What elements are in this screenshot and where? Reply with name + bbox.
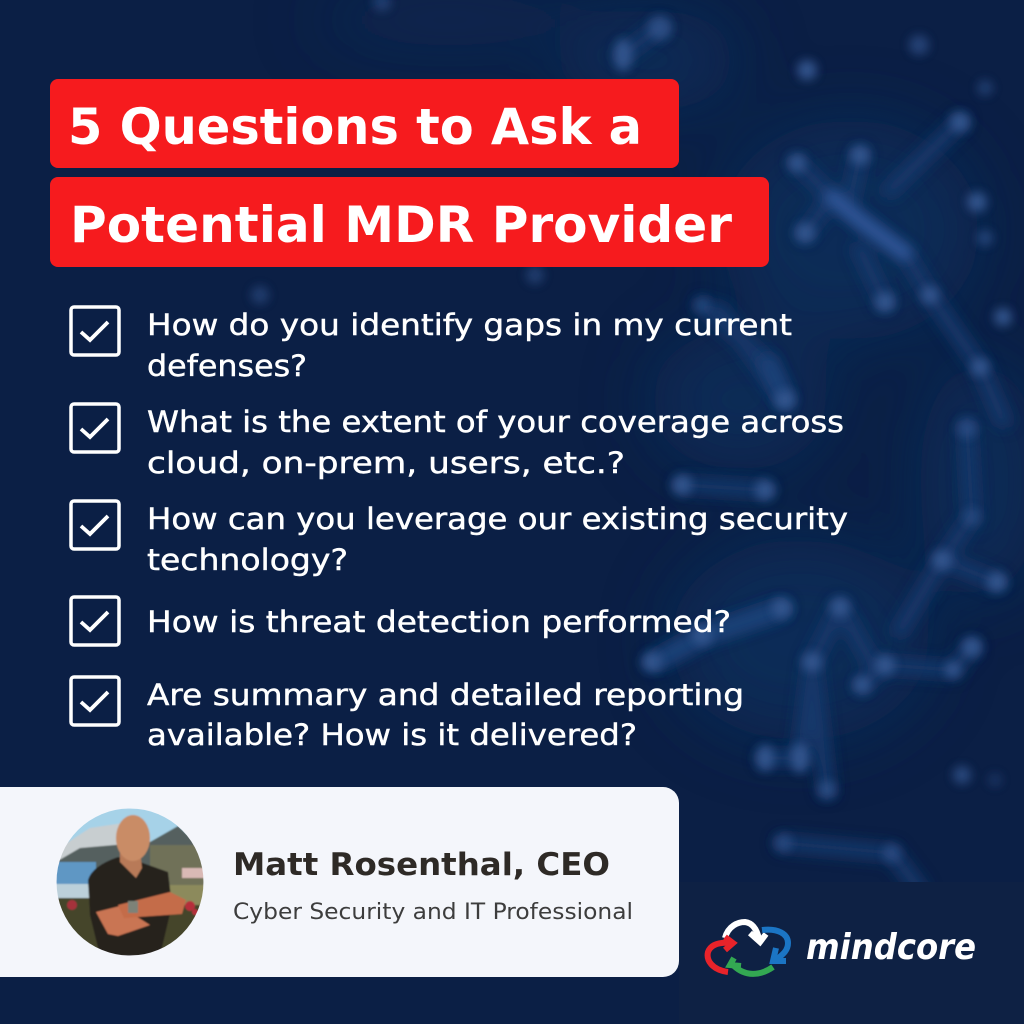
- question 5: Are summary and detailed reporting: [147, 678, 744, 712]
- question 4: How is threat detection performed?: [147, 605, 731, 639]
- question 3: How can you leverage our existing security: [147, 502, 848, 536]
- question 5: available? How is it delivered?: [147, 718, 637, 752]
- checklist: [71, 307, 848, 752]
- title banner line 2: [50, 177, 769, 267]
- title: [50, 79, 769, 267]
- question 4: [71, 597, 731, 645]
- question 2: [71, 404, 844, 480]
- wordmark: mindcore: [806, 927, 976, 968]
- question 3: [71, 501, 848, 577]
- question 2: cloud, on-prem, users, etc.?: [147, 446, 625, 480]
- icon: checkbox: [71, 677, 119, 725]
- icon: cloud arrows: [708, 922, 788, 974]
- title banner line 1: 5 Questions to Ask a: [68, 98, 642, 156]
- question 1: defenses?: [147, 349, 307, 383]
- icon: checkbox: [71, 307, 119, 355]
- question 1: How do you identify gaps in my current: [147, 308, 792, 342]
- question 2: What is the extent of your coverage across: [147, 405, 844, 439]
- icon: checkbox: [71, 501, 119, 549]
- logo: mindcore: [708, 922, 976, 974]
- question 3: technology?: [147, 543, 348, 577]
- author photo: [56, 808, 204, 956]
- author name: Matt Rosenthal, CEO: [233, 847, 610, 883]
- icon: checkbox: [71, 404, 119, 452]
- author card: [0, 787, 679, 977]
- icon: checkbox: [71, 597, 119, 645]
- question 5: [71, 677, 744, 752]
- question 1: [71, 307, 792, 383]
- title banner line 1: [50, 79, 679, 168]
- title banner line 2: Potential MDR Provider: [70, 196, 732, 254]
- author role: Cyber Security and IT Professional: [233, 900, 633, 925]
